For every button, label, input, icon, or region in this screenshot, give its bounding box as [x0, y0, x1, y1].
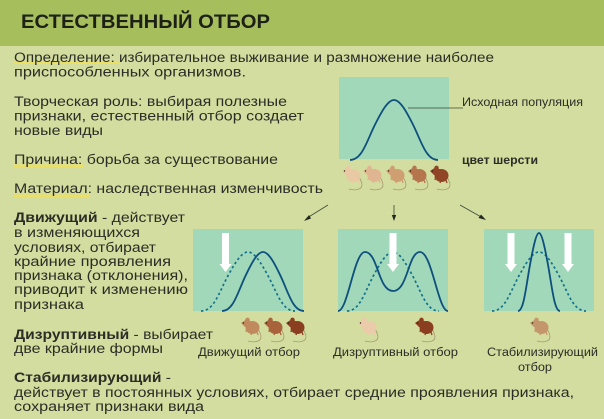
- text: material: Материал: наследственная изменчивость: [14, 181, 323, 196]
- mouse: disruptive light: [358, 318, 378, 342]
- chart: initial population: [339, 77, 463, 160]
- text: cause: Причина: борьба за существование: [14, 152, 278, 167]
- arrow: selection pressure: [387, 233, 399, 272]
- chart: directional selection: [193, 229, 304, 311]
- text: directional selection: Движущий - действует: [14, 210, 185, 225]
- text: directional selection: признака (отклонения),: [14, 268, 188, 283]
- mouse: disruptive dark: [415, 318, 435, 342]
- label: initial population: Исходная популяция: [462, 97, 583, 109]
- text: directional selection: [14, 210, 188, 312]
- highlight: Определение: [14, 61, 120, 64]
- label: disruptive: Дизруптивный отбор: [333, 347, 458, 359]
- mice: directional: [241, 318, 306, 342]
- text: disruptive selection: [14, 327, 213, 356]
- mice: fur colour range: [342, 166, 450, 190]
- text: directional selection: признака: [14, 297, 85, 312]
- text: definition: приспособленных организмов.: [14, 64, 246, 80]
- title: ЕСТЕСТВЕННЫЙ ОТБОР: [21, 11, 270, 33]
- label: fur colour: цвет шерсти: [462, 155, 538, 167]
- mouse: stabilizing: [530, 318, 550, 342]
- text: disruptive selection: Дизруптивный - выбирает: [14, 327, 213, 342]
- text: creative role: признаки, естественный отбор создает: [14, 108, 304, 124]
- highlight: Причина: [14, 164, 84, 168]
- text: definition: Определение: избирательное выживание и размножение наиболее: [14, 50, 494, 65]
- text: creative role: новые виды: [14, 123, 103, 138]
- text: definition: [14, 50, 494, 80]
- label: stabilizing: [487, 347, 598, 374]
- text: stabilizing selection: [14, 370, 574, 414]
- text: stabilizing selection: действует в постоянных условиях, отбирает средние проявления признака,: [14, 385, 574, 400]
- label: stabilizing: Стабилизирующий: [487, 347, 598, 359]
- text: directional selection: в изменяющихся: [14, 225, 140, 240]
- text: directional selection: условиях, отбирает: [14, 240, 156, 255]
- arrow: selection pressure: [220, 233, 232, 272]
- chart: stabilizing selection: [484, 229, 594, 311]
- header band: [0, 0, 604, 46]
- label: directional: Движущий отбор: [198, 347, 300, 359]
- text: disruptive selection: две крайние формы: [14, 341, 163, 356]
- arrow: right selection pressure: [562, 233, 574, 272]
- arrow: to directional: [304, 205, 328, 221]
- text: creative role: [14, 94, 304, 138]
- label: stabilizing: отбор: [518, 362, 552, 374]
- arrow: to disruptive: [392, 205, 396, 221]
- text: stabilizing selection: Стабилизирующий -: [14, 370, 171, 385]
- arrow: to stabilizing: [460, 205, 486, 220]
- text: creative role: Творческая роль: выбирая полезные: [14, 94, 287, 109]
- highlight: Материал: [14, 194, 90, 198]
- text: directional selection: приводит к изменению: [14, 282, 188, 297]
- arrow: left selection pressure: [505, 233, 517, 272]
- text: stabilizing selection: сохраняет признаки вида: [14, 399, 205, 414]
- text: directional selection: крайние проявления: [14, 254, 171, 269]
- chart: disruptive selection: [338, 229, 448, 311]
